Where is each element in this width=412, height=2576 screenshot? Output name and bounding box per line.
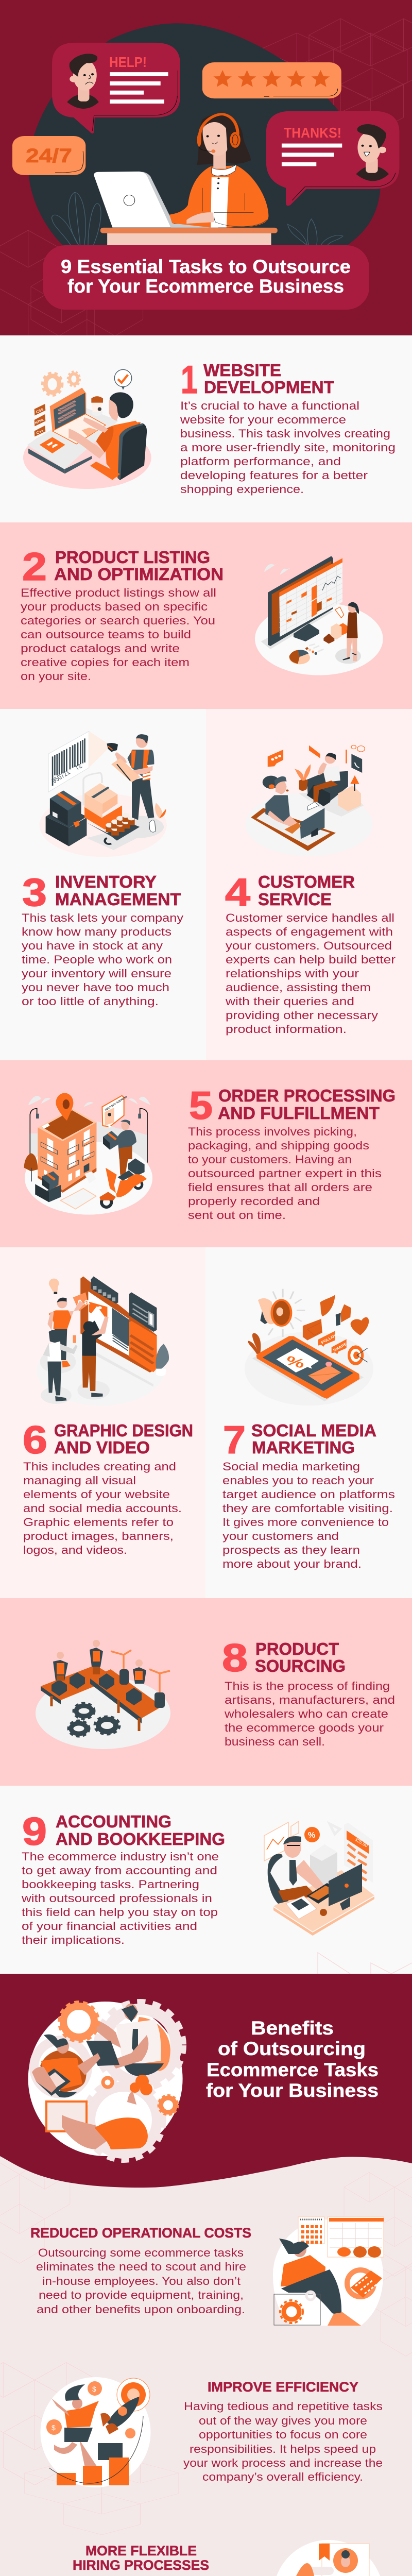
body text: Social media marketing (222, 1460, 360, 1473)
heading (73, 2543, 209, 2573)
illustration: phone, megaphone and social icons: SHARE (332, 1342, 348, 1352)
illustration: designers at a web layout: Aa (76, 1297, 91, 1307)
illustration: developer at laptop: C++ (36, 428, 44, 435)
illustration: agent on tablet and customer on sofa (245, 745, 373, 856)
title pill: for Your Ecommerce Business (67, 276, 344, 297)
body text: more about your brand. (222, 1557, 362, 1570)
agent woman with headset (169, 114, 268, 227)
body text: elements of your website (23, 1488, 170, 1501)
body text (21, 586, 216, 683)
illustration: designers at a web layout (37, 1276, 169, 1405)
illustration: warehouse worker scanning boxes: 950721 (50, 769, 72, 784)
body text: your products based on specific (21, 600, 208, 613)
benefits title: Benefits (251, 2018, 334, 2039)
body text: field ensures that all orders are (188, 1181, 372, 1194)
heading: CUSTOMER (258, 872, 355, 891)
heading: PRODUCT LISTING (55, 548, 210, 567)
heading (203, 361, 334, 397)
panel: hero (0, 0, 412, 385)
heading: GRAPHIC DESIGN (54, 1421, 193, 1440)
heading: AND OPTIMIZATION (54, 565, 224, 584)
number 4: 4 (225, 871, 250, 914)
heading: DEVELOPMENT (204, 378, 334, 397)
body text: prospects as they learn (222, 1544, 360, 1556)
body text: and other benefits upon onboarding. (37, 2303, 245, 2316)
body text: target audience on platforms (222, 1488, 395, 1501)
body text: outsourced partner expert in this (188, 1167, 382, 1180)
illustration: phone, megaphone and social icons: % (283, 1353, 307, 1371)
body text: know how many products (22, 925, 171, 938)
body text: artisans, manufacturers, and (225, 1693, 395, 1706)
body text: audience, assisting them (226, 981, 371, 994)
illustration: woman and rocket: $ (52, 2424, 56, 2432)
illustration: developer at laptop: HTML (35, 418, 45, 425)
panel: 4 customer service (206, 709, 412, 1060)
benefits title (206, 2018, 379, 2101)
number 1: 1 (181, 358, 198, 402)
body text: Effective product listings show all (21, 586, 216, 599)
heading: SERVICE (258, 890, 332, 909)
body text: in-house employees. You also don’t (42, 2275, 241, 2287)
illustration: teamwork circle (28, 2002, 183, 2160)
body text (22, 911, 183, 1008)
bubble: 24/7 (12, 136, 85, 175)
heading: HIRING PROCESSES (73, 2557, 209, 2573)
body text: relationships with your (226, 967, 359, 980)
benefits title: for Your Business (206, 2080, 379, 2101)
body text: It gives more convenience to (222, 1516, 389, 1529)
body text: out of the way gives you more (199, 2414, 367, 2427)
body text: Customer service handles all (226, 911, 394, 924)
illustration: accountant at desk: % (308, 1831, 315, 1840)
body text: product images, banners, (23, 1530, 174, 1543)
heading (255, 1639, 346, 1675)
illustration: phone, megaphone and social icons (245, 1289, 373, 1405)
number 7: 7 (223, 1418, 246, 1462)
body text: Outsourcing some ecommerce tasks (38, 2246, 244, 2259)
panel: 2 product listing and optimization (0, 522, 412, 709)
body text: This task lets your company (22, 911, 183, 924)
body text: aspects of engagement with (226, 925, 393, 938)
body text: packaging, and shipping goods (188, 1139, 369, 1152)
panel: reduced operational costs (30, 2217, 384, 2326)
body text: you have in stock at any (22, 939, 163, 952)
number 2: 2 (22, 545, 47, 589)
body text (188, 1125, 382, 1222)
body text: providing other necessary (226, 1009, 378, 1022)
laptop (94, 172, 219, 228)
body text: on your site. (21, 670, 91, 683)
illustration: warehouse worker scanning boxes (39, 731, 167, 857)
body text: This is the process of finding (225, 1680, 390, 1692)
body text: wholesalers who can create (224, 1707, 388, 1720)
heading: AND BOOKKEEPING (56, 1829, 225, 1849)
illustration: factory conveyor and workers (36, 1640, 170, 1749)
body text (224, 1680, 395, 1748)
body text: their implications. (22, 1934, 125, 1946)
body text (222, 1460, 395, 1570)
heading: AND FULFILLMENT (218, 1104, 380, 1123)
body text: company’s overall efficiency. (202, 2470, 363, 2483)
panel: 6 graphic design and video (0, 1247, 205, 1598)
illustration: spreadsheet monitor and woman (255, 556, 383, 675)
body text: shopping experience. (180, 483, 304, 496)
label: thanks: THANKS! (284, 125, 341, 141)
heading: INVENTORY (55, 872, 157, 891)
label: help: HELP! (109, 54, 147, 70)
body text: It’s crucial to have a functional (180, 399, 359, 412)
panel: benefits header (0, 1974, 412, 2576)
hero illustration (12, 23, 400, 246)
panel: 1 website development (0, 335, 412, 522)
body text: enables you to reach your (222, 1474, 374, 1487)
body text: time. People who work on (22, 953, 172, 966)
illustration: phone, megaphone and social icons: FOLLOW (320, 1332, 339, 1345)
body text (225, 911, 396, 1036)
heading: SOCIAL MEDIA (251, 1421, 376, 1440)
illustration: delivery scooter and building: DELIVERY ADDRESS (105, 1095, 128, 1112)
bubble: stars rating (202, 62, 341, 98)
background pattern on light area (0, 2160, 412, 2576)
maroon wave (0, 1974, 412, 2188)
number 9: 9 (22, 1810, 47, 1854)
body text: website for your ecommerce (180, 413, 346, 426)
body text: Graphic elements refer to (23, 1516, 174, 1529)
body text: with their queries and (225, 995, 354, 1008)
heading: ORDER PROCESSING (218, 1086, 396, 1105)
heading: AND VIDEO (54, 1438, 150, 1457)
heading: SOURCING (255, 1656, 346, 1675)
body text (183, 2400, 383, 2483)
number 8: 8 (222, 1636, 248, 1680)
panel: 9 accounting and bookkeeping (0, 1786, 412, 1974)
body text: a more user-friendly site, monitoring (180, 441, 396, 454)
heading (251, 1421, 376, 1457)
body text (21, 1850, 219, 1946)
heading: MORE FLEXIBLE (85, 2543, 197, 2558)
panel: more flexible hiring processes (32, 2540, 383, 2576)
body text: responsibilities. It helps speed up (190, 2443, 376, 2455)
body text: of your financial activities and (22, 1920, 197, 1933)
body text: The ecommerce industry isn’t one (22, 1850, 219, 1863)
body text: platform performance, and (180, 455, 341, 468)
body text: This includes creating and (23, 1460, 176, 1473)
heading: IMPROVE EFFICIENCY (208, 2379, 358, 2395)
illustration: developer at laptop: CSS (35, 407, 44, 414)
heading (55, 872, 181, 909)
body text: product catalogs and write (21, 642, 180, 655)
body text: business can sell. (225, 1735, 325, 1748)
bubble: help (52, 43, 180, 133)
body text (36, 2246, 246, 2316)
body text: to get away from accounting and (22, 1864, 217, 1877)
panel: 8 product sourcing (0, 1598, 412, 1786)
heading: MARKETING (252, 1438, 355, 1457)
plants (52, 192, 343, 246)
body text: product information. (226, 1023, 347, 1036)
body text: and social media accounts. (23, 1502, 182, 1515)
panel: 3 inventory management (0, 709, 206, 1060)
body text: your customers and (222, 1530, 339, 1543)
title pill: 9 Essential Tasks to Outsource (61, 256, 351, 277)
panel: improve efficiency (40, 2377, 383, 2487)
illustration: accountant at desk (264, 1821, 374, 1936)
panel: 7 social media marketing (205, 1247, 412, 1598)
title pill (43, 245, 369, 310)
number 6: 6 (23, 1418, 47, 1462)
body text: can outsource teams to build (21, 628, 191, 641)
benefits title: Ecommerce Tasks (207, 2059, 379, 2080)
body text: sent out on time. (188, 1209, 286, 1222)
body text: Having tedious and repetitive tasks (184, 2400, 383, 2413)
illustration: woman with finance charts (273, 2217, 384, 2326)
illustration: delivery scooter and building (24, 1093, 152, 1215)
body text: experts can help build better (226, 953, 396, 966)
heading: MANAGEMENT (55, 890, 181, 909)
heading: WEBSITE (203, 361, 281, 380)
body text: bookkeeping tasks. Partnering (22, 1878, 199, 1891)
body text: business. This task involves creating (180, 427, 390, 440)
bubble: thanks (266, 111, 400, 206)
body text: with outsourced professionals in (21, 1892, 212, 1905)
body text: your customers. Outsourced (226, 939, 392, 952)
body text: categories or search queries. You (21, 614, 215, 627)
heading: ACCOUNTING (56, 1812, 171, 1831)
illustration: developer at laptop (23, 369, 151, 489)
body text: need to provide equipment, training, (39, 2289, 244, 2301)
body text (23, 1460, 182, 1556)
heading (54, 548, 224, 584)
heading: REDUCED OPERATIONAL COSTS (30, 2225, 251, 2241)
desk (100, 228, 278, 246)
heading (56, 1812, 225, 1849)
body text: this field can help you stay on top (22, 1906, 218, 1919)
body text: to your customers. Having an (188, 1153, 352, 1166)
body text: This process involves picking, (188, 1125, 357, 1138)
body text: your inventory will ensure (22, 967, 171, 980)
illustration: woman reviewing resume (273, 2540, 383, 2576)
number 3: 3 (22, 871, 47, 914)
body text (180, 399, 396, 496)
benefits title: of Outsourcing (218, 2038, 366, 2059)
illustration: accountant at desk: 325.80 (354, 1837, 369, 1848)
illustration: warehouse worker scanning boxes: 72 (73, 762, 84, 771)
heading (54, 1421, 193, 1457)
body text: properly recorded and (188, 1195, 320, 1208)
heading: PRODUCT (255, 1639, 339, 1658)
heading (218, 1086, 396, 1123)
body text: developing features for a better (180, 469, 368, 482)
illustration: woman and rocket: $ (92, 2385, 96, 2393)
body text: you never have too much (22, 981, 169, 994)
body text: creative copies for each item (21, 656, 190, 669)
illustration: woman and rocket (40, 2377, 150, 2487)
body text: managing all visual (23, 1474, 136, 1487)
body text: the ecommerce goods your (225, 1721, 384, 1734)
body text: or too little of anything. (22, 995, 159, 1008)
dark blob (28, 23, 381, 246)
body text: opportunities to focus on core (199, 2428, 367, 2441)
label: 24/7: 24/7 (26, 145, 72, 167)
panel: 5 order processing and fulfillment (0, 1060, 412, 1247)
number 5: 5 (189, 1084, 213, 1128)
heading (258, 872, 355, 909)
body text: your work process and increase the (183, 2456, 383, 2469)
body text: logos, and videos. (23, 1544, 127, 1556)
body text: eliminates the need to scout and hire (36, 2260, 246, 2273)
body text: they are comfortable visiting. (222, 1502, 393, 1515)
